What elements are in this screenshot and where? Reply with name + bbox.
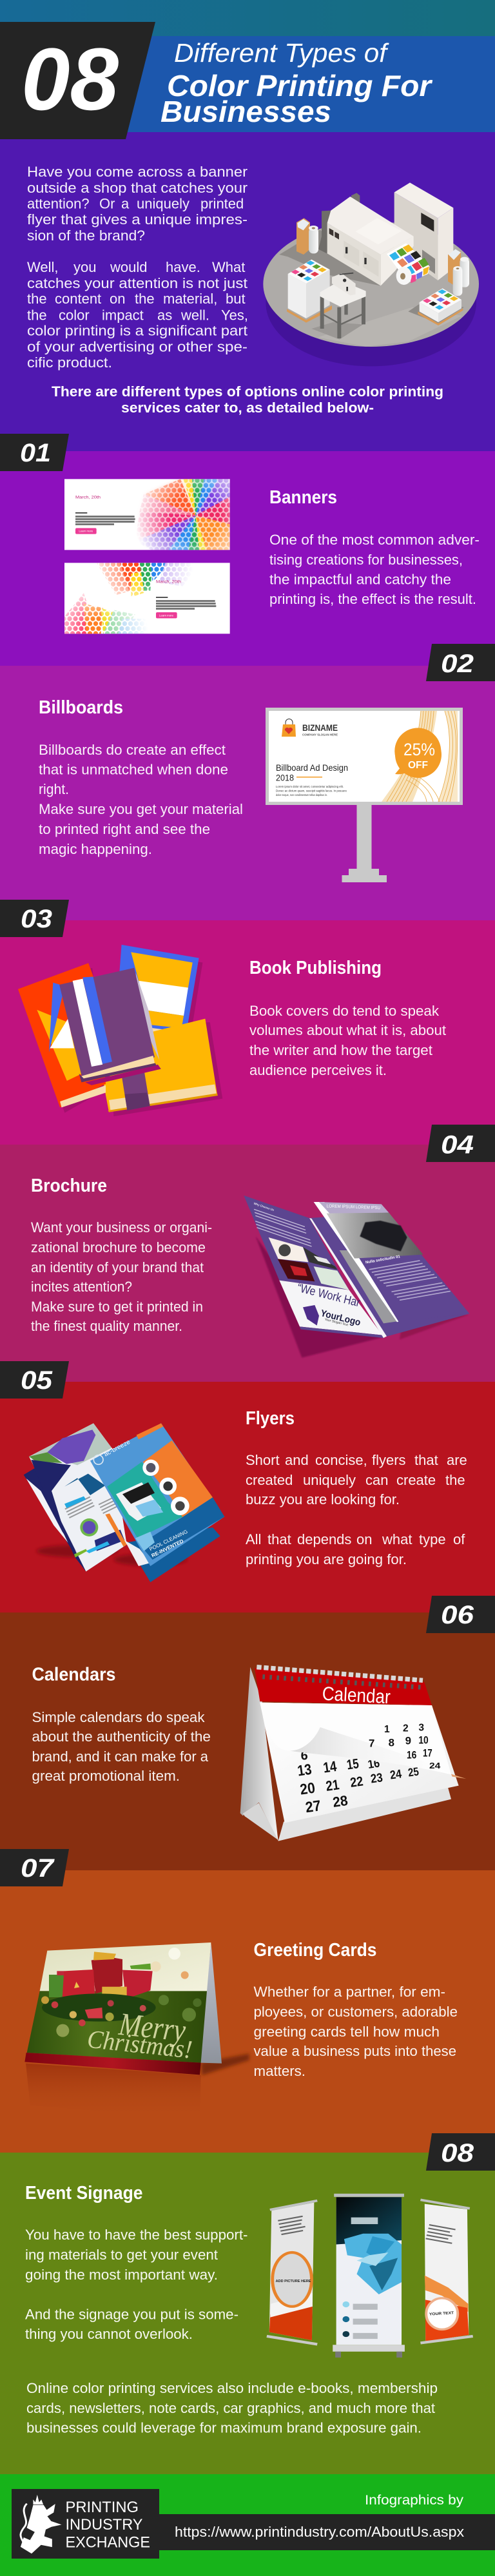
- paper boxes and rolls: [296, 218, 469, 296]
- illustration: fanned flyers: [24, 1423, 224, 1582]
- text: flyers: the: [445, 1472, 465, 1488]
- number tag 07: [0, 1849, 69, 1886]
- number tag 02: 02: [441, 650, 474, 678]
- calendar dates on curled page: 16: [407, 1748, 416, 1761]
- heading: flyers: Flyers: [246, 1408, 295, 1429]
- banner two: [64, 563, 230, 634]
- number tag 04: [426, 1125, 495, 1162]
- number tag 01: 01: [20, 439, 51, 467]
- page curl: [260, 1703, 466, 1779]
- text: event signage: going the most important way.: [25, 2267, 218, 2283]
- text: banners: tising creations for businesses,: [269, 552, 463, 568]
- text: greeting cards: ployees, or customers, adorable: [254, 2004, 458, 2020]
- card greeting: [86, 2002, 196, 2064]
- calendar dates on lower page: 20: [299, 1779, 316, 1798]
- right roll-up banner: [420, 2200, 473, 2343]
- introduction text: content: [55, 291, 101, 307]
- text: event signage: thing you cannot overlook.: [25, 2326, 193, 2342]
- introduction text: Well,: [27, 259, 58, 275]
- introduction text: as: [157, 307, 172, 324]
- text: flyers: printing you are going for.: [246, 1551, 407, 1567]
- text: flyers: created: [246, 1472, 293, 1488]
- text: flyers: and: [285, 1452, 309, 1468]
- calendar dates on curled page: 2: [403, 1723, 409, 1734]
- weekday labels: FRIDAY: [395, 1714, 406, 1718]
- blue book: [115, 945, 199, 1043]
- illustration: folded brochure: Your Slogan Text: [324, 1317, 349, 1327]
- heading: billboards: Billboards: [39, 697, 123, 718]
- illustration: billboard: dolor neque, non condimentum tellus dapibus in.: [276, 793, 327, 797]
- heading: event signage: Event Signage: [25, 2183, 143, 2203]
- number tag 08: 08: [441, 2139, 474, 2167]
- back flyer: [24, 1468, 127, 1571]
- text: flyers: buzz you are looking for.: [246, 1491, 400, 1507]
- discount badge: [394, 728, 442, 778]
- heading: greeting cards: Greeting Cards: [254, 1940, 376, 1961]
- text: event signage: And the signage you put is some-: [25, 2306, 238, 2323]
- panel: 06 calendars: [0, 1596, 495, 1870]
- text: brochure: incites attention?: [31, 1279, 132, 1295]
- illustration: two printed banners: [64, 470, 238, 634]
- illustration: stack of books: [18, 945, 222, 1116]
- number tag 08: [426, 2133, 495, 2171]
- banner one: [64, 479, 230, 550]
- colour print roll: [387, 243, 430, 285]
- calendar dates on curled page: 8: [389, 1736, 394, 1748]
- logo: printing industry exchange: PRINTING: [66, 2499, 139, 2516]
- calendar dates on lower page: 23: [370, 1771, 383, 1787]
- front flyer: POOL CLEANING: [148, 1529, 189, 1552]
- introduction text: the: [27, 291, 47, 307]
- introduction text: attention?: [27, 196, 90, 211]
- illustration: billboard: COMPANY SLOGAN HERE: [302, 733, 338, 737]
- introduction text: Or: [99, 196, 115, 211]
- closing text: Online color printing services also include e-books, membership: [26, 2380, 438, 2396]
- left roll-up banner: [267, 2201, 317, 2344]
- illustration: billboard: 2018: [276, 772, 294, 782]
- number tag 03: 03: [21, 905, 52, 933]
- introduction text: of your advertising or other spe-: [27, 339, 248, 355]
- introduction text: the: [135, 291, 155, 307]
- purple book with ribbon: [59, 968, 161, 1110]
- illustration: isometric print shop: [263, 182, 479, 366]
- text: flyers: are: [447, 1452, 467, 1468]
- header number tag: 08: [21, 30, 119, 129]
- text: banners: the impactful and catchy the: [269, 571, 451, 588]
- weekday labels: THURSDAY: [374, 1715, 391, 1719]
- stacks of printed sheets: [287, 260, 463, 325]
- text: book publishing: [249, 1003, 446, 1078]
- calendar dates on curled page: 10: [418, 1734, 429, 1746]
- number tag 05: [0, 1361, 69, 1399]
- panel: 07 greeting cards: [0, 1849, 495, 2153]
- text: billboards: Make sure you get your material: [39, 801, 243, 817]
- text: flyers: uniquely: [303, 1472, 356, 1488]
- illustration: folded brochure: LOREM IPSUM LOREM IPSU: [327, 1204, 380, 1210]
- bottom right flyer: [124, 1527, 220, 1582]
- cutting table: [320, 273, 366, 338]
- text: banners: [269, 532, 480, 607]
- calendar dates on lower page: 6: [301, 1749, 308, 1763]
- red book: [18, 963, 106, 1107]
- icon: heraldic lion: [21, 2495, 62, 2553]
- introduction text: well.: [180, 307, 209, 324]
- title: Businesses: [160, 95, 331, 128]
- calendar dates on lower page: [296, 1749, 420, 1816]
- introduction text: but: [226, 291, 246, 307]
- introduction text: [27, 164, 248, 371]
- text: brochure: the finest quality manner.: [31, 1318, 182, 1334]
- calendar dates on lower page: 22: [349, 1774, 364, 1790]
- text: greeting cards: value a business puts into these: [254, 2043, 456, 2059]
- text: flyers: of: [453, 1531, 465, 1547]
- banner one: March, 20th: [75, 495, 101, 499]
- card greeting: Christmas!: [86, 2024, 193, 2064]
- introduction text: What: [212, 259, 245, 275]
- text: event signage: [25, 2227, 248, 2342]
- icon: shopping bag: [282, 719, 296, 737]
- weekday labels: SATURDAY: [409, 1714, 424, 1718]
- text: brochure: zational brochure to become: [31, 1239, 206, 1255]
- text: billboards: magic happening.: [39, 841, 152, 857]
- calendar dates on lower page: 24: [389, 1767, 403, 1782]
- calendar dates on lower page: 13: [296, 1761, 313, 1779]
- number tag 01: [0, 434, 69, 471]
- introduction text: material,: [163, 291, 217, 307]
- text: calendars: about the authenticity of the: [32, 1729, 211, 1745]
- number tag 02: [426, 644, 495, 681]
- text: billboards: right.: [39, 781, 69, 797]
- front flyer: [90, 1423, 224, 1566]
- text: flyers: Short: [246, 1452, 280, 1468]
- text: calendars: Simple calendars do speak: [32, 1709, 206, 1725]
- illustration: billboard: Lorem ipsum dolor sit amet, consectetur adipiscing elit.: [276, 785, 344, 788]
- text: flyers: that: [414, 1452, 438, 1468]
- text: greeting cards: [254, 1984, 458, 2079]
- discount badge: 25%: [403, 740, 435, 759]
- number tag 05: 05: [21, 1366, 53, 1395]
- text: flyers: [246, 1452, 467, 1567]
- lead-in sentence: [52, 383, 443, 416]
- banner one: Learn more: [79, 530, 93, 533]
- right roll-up banner: YOUR TEXT: [429, 2311, 454, 2316]
- panel: 01 banners: [0, 434, 495, 666]
- panel: 02 billboards: [0, 644, 495, 920]
- text: calendars: brand, and it can make for a: [32, 1748, 209, 1765]
- heading: banners: Banners: [269, 487, 337, 508]
- middle flyer: [29, 1423, 127, 1571]
- text: banners: One of the most common adver-: [269, 532, 480, 548]
- number tag 07: 07: [21, 1854, 55, 1883]
- text: book publishing: volumes about what it is, about: [249, 1022, 446, 1038]
- text: flyers: that: [267, 1531, 291, 1547]
- text: billboards: Billboards do create an effect: [39, 742, 226, 758]
- introduction text: on: [110, 291, 125, 307]
- illustration: billboard: [266, 708, 463, 882]
- text: banners: printing is, the effect is the result.: [269, 591, 476, 607]
- introduction text: the: [27, 307, 47, 324]
- printing machine: [318, 193, 414, 286]
- text: flyers: flyers: [372, 1452, 406, 1468]
- introduction text: you: [73, 259, 96, 275]
- text: brochure: Make sure to get it printed in: [31, 1299, 203, 1315]
- weekday labels: MONDAY: [311, 1715, 329, 1719]
- panel: header and introduction: [0, 0, 495, 451]
- text: flyers: what: [382, 1531, 412, 1547]
- illustration: folded brochure: Why Choose Us: [253, 1202, 275, 1212]
- number tag 04: 04: [441, 1130, 474, 1159]
- calendar dates on curled page: 7: [369, 1738, 374, 1750]
- text: calendars: great promotional item.: [32, 1768, 180, 1784]
- panel: 08 event signage: [0, 2133, 495, 2474]
- text: brochure: Want your business or organi-: [31, 1219, 212, 1235]
- text: brochure: an identity of your brand that: [31, 1259, 204, 1275]
- introduction text: Yes,: [221, 307, 248, 324]
- illustration: desk calendar: [240, 1667, 466, 1841]
- text: billboards: [39, 742, 243, 857]
- spiral rings: [257, 1667, 423, 1687]
- weekday labels: [285, 1714, 424, 1719]
- illustration: folded brochure: [244, 1196, 469, 1358]
- number tag 06: 06: [441, 1601, 474, 1629]
- calendar heading: Calendar: [322, 1683, 391, 1708]
- calendar dates on curled page: 9: [405, 1735, 411, 1747]
- front flyer: ac-breeze: [103, 1438, 131, 1458]
- panel: footer: [0, 2474, 495, 2576]
- logo: printing industry exchange: [12, 2489, 159, 2559]
- illustration: three roll-up banners: [267, 2195, 473, 2358]
- text: flyers: All: [246, 1531, 261, 1547]
- introduction text: outside a shop that catches your: [27, 180, 248, 196]
- illustration: christmas card: [24, 1942, 249, 2120]
- introduction text: sion of the brand?: [27, 228, 145, 244]
- lead-in sentence: There are different types of options online color printing: [52, 383, 443, 400]
- introduction text: uniquely: [137, 196, 189, 211]
- introduction text: catches your attention is not just: [27, 275, 248, 291]
- text: flyers: concise,: [315, 1452, 367, 1468]
- illustration: folded brochure: “We Work Har: [296, 1281, 362, 1309]
- text: billboards: that is unmatched when done: [39, 762, 228, 778]
- introduction text: would: [110, 259, 147, 275]
- printer cabinet: [394, 182, 453, 280]
- gifts: [41, 1948, 202, 2037]
- heading: calendars: Calendars: [32, 1664, 116, 1685]
- introduction text: color: [59, 307, 90, 324]
- closing text: businesses could leverage for maximum brand exposure gain.: [26, 2419, 422, 2436]
- panel: 04 brochure: [0, 1125, 495, 1382]
- credit bar: Infographics by: [365, 2493, 464, 2508]
- calendar dates on curled page: [369, 1722, 441, 1770]
- calendar dates on lower page: 27: [304, 1797, 322, 1816]
- weekday labels: SUNDAY: [285, 1716, 304, 1719]
- discount badge: OFF: [408, 760, 428, 771]
- introduction text: printed: [200, 196, 244, 211]
- illustration: billboard: Billboard Ad Design: [276, 762, 348, 773]
- calendar dates on lower page: 16: [367, 1756, 380, 1771]
- logo: printing industry exchange: INDUSTRY: [66, 2516, 143, 2533]
- title: Color Printing For: [167, 69, 432, 102]
- calendar dates on lower page: 14: [322, 1758, 338, 1776]
- text: billboards: to printed right and see the: [39, 821, 210, 837]
- panel: 03 book publishing: [0, 900, 495, 1145]
- text: flyers: can: [365, 1472, 388, 1488]
- introduction text: a: [121, 196, 130, 211]
- text: book publishing: the writer and how the target: [249, 1042, 432, 1058]
- illustration: billboard: BIZNAME: [302, 722, 338, 733]
- calendar dates on curled page: 1: [384, 1724, 390, 1735]
- introduction text: Have you come across a banner: [27, 164, 248, 180]
- text: book publishing: Book covers do tend to speak: [249, 1003, 440, 1019]
- card greeting: Merry: [117, 2006, 188, 2048]
- credit bar: [159, 2493, 495, 2550]
- number tag 06: [426, 1596, 495, 1633]
- heading: brochure: Brochure: [31, 1176, 107, 1196]
- calendar dates on curled page: 3: [418, 1722, 424, 1733]
- banner two: Learn more: [159, 614, 173, 617]
- text: greeting cards: greeting cards tell how much: [254, 2024, 440, 2040]
- text: flyers: depends: [297, 1531, 351, 1547]
- heading: book publishing: Book Publishing: [249, 958, 382, 978]
- front flyer: RE-INVENTED: [151, 1538, 184, 1558]
- centre roll-up banner: [333, 2195, 405, 2358]
- text: book publishing: audience perceives it.: [249, 1062, 387, 1078]
- calendar dates on lower page: 21: [325, 1776, 340, 1794]
- calendar dates on lower page: 15: [345, 1756, 360, 1773]
- text: flyers: type: [419, 1531, 446, 1547]
- title: [160, 38, 432, 128]
- introduction text: color printing is a significant part: [27, 322, 248, 339]
- text: greeting cards: Whether for a partner, for em-: [254, 1984, 445, 2000]
- header number tag: [0, 22, 155, 139]
- introduction text: have.: [166, 259, 200, 275]
- text: event signage: You have to have the best support-: [25, 2227, 248, 2243]
- text: greeting cards: matters.: [254, 2063, 306, 2079]
- introduction text: cific product.: [27, 354, 112, 371]
- weekday labels: WEDNESDAY: [354, 1715, 374, 1719]
- text: event signage: ing materials to get your event: [25, 2247, 218, 2263]
- text: flyers: create: [396, 1472, 436, 1488]
- calendar dates on lower page: 25: [407, 1765, 420, 1779]
- closing text: cards, newsletters, note cards, car graphics, and much more that: [26, 2400, 435, 2416]
- credit bar: https://www.printindustry.com/AboutUs.aspx: [175, 2524, 464, 2540]
- yellow book: [104, 1019, 218, 1112]
- lead-in sentence: services cater to, as detailed below-: [121, 400, 374, 416]
- calendar dates on curled page: 17: [423, 1747, 432, 1759]
- illustration: billboard: Donec ac dictum quam, suscipit sagittis lacus. In posuere: [276, 789, 347, 793]
- illustration: folded brochure: YourLogo: [320, 1308, 362, 1328]
- text: brochure: [31, 1219, 212, 1334]
- left roll-up banner: ADD PICTURE HERE: [276, 2280, 311, 2283]
- text: calendars: [32, 1709, 211, 1784]
- number tag 03: [0, 900, 69, 937]
- panel: 05 flyers: [0, 1361, 495, 1612]
- calendar dates on curled page: 24: [429, 1761, 441, 1770]
- banner two: March, 20th: [156, 579, 181, 584]
- calendar dates on lower page: 28: [332, 1792, 349, 1810]
- closing text: [26, 2380, 438, 2436]
- text: flyers: on: [356, 1531, 372, 1547]
- weekday labels: TUESDAY: [334, 1715, 352, 1719]
- introduction text: flyer that gives a unique impres-: [27, 211, 248, 228]
- illustration: folded brochure: Nulla solicitudin 01: [365, 1255, 401, 1265]
- title: Different Types of: [174, 38, 389, 68]
- introduction text: impact: [102, 307, 144, 324]
- logo: printing industry exchange: EXCHANGE: [66, 2534, 150, 2551]
